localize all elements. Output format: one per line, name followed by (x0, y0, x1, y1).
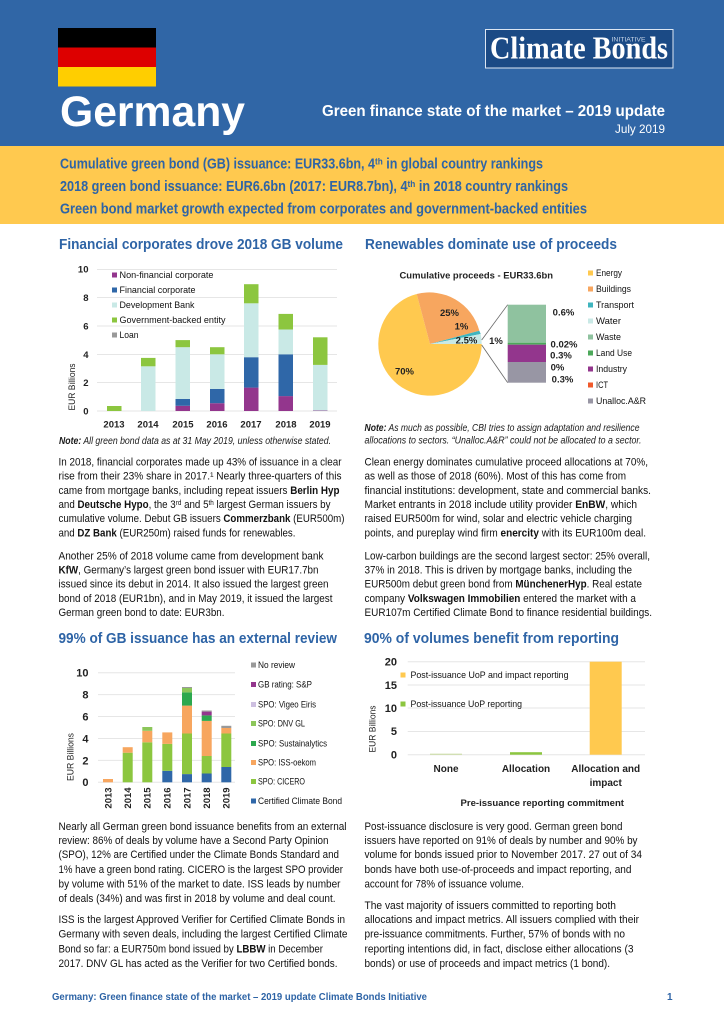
legend: reporting type (400, 670, 568, 709)
pie chart: cumulative proceeds by sector (378, 268, 646, 406)
bar chart: reporting commitment: 10 (385, 703, 397, 715)
title: Germany: Germany (60, 88, 245, 136)
bar chart: external review by year: 4 (82, 734, 89, 746)
bar chart: external review by year: 0 (82, 777, 88, 789)
pie chart: cumulative proceeds by sector: 1% (455, 322, 469, 332)
text block: reporting: account for 78% of issuance volume. (364, 878, 524, 890)
pie chart: cumulative proceeds by sector: 0.6% (553, 308, 575, 318)
bar chart: external review by year: 8 (82, 690, 88, 702)
key finding: cumulative issuance: th (375, 156, 383, 168)
legend: reporting type: Post-issuance UoP reporting (410, 699, 522, 709)
bar chart: issuance by issuer type: 8 (83, 293, 88, 304)
bar chart: issuance by issuer type: EUR Billions (67, 363, 77, 410)
bar chart: issuance by issuer type (67, 264, 337, 430)
bar chart: issuance by issuer type: 2019 (309, 420, 331, 430)
bar chart: reporting commitment: Allocation and (571, 764, 640, 775)
pie chart: cumulative proceeds by sector: 1% (489, 336, 503, 347)
legend: review types: SPO: Sustainalytics (258, 738, 327, 748)
legend: issuer type: Financial corporate (120, 285, 196, 295)
legend: sectors: Unalloc.A&R (596, 396, 646, 406)
legend: review types: SPO: CICERO (258, 776, 305, 786)
legend: review types (251, 660, 342, 806)
bar chart: reporting commitment: 15 (385, 680, 397, 692)
legend: review types: SPO: Vigeo Eiris (258, 700, 316, 710)
text block: financial corporates: issued since its debut in 2014. It also issued the largest green (58, 578, 328, 590)
legend: sectors (588, 268, 646, 406)
legend: sectors: Waste (596, 332, 621, 342)
bar chart: external review by year (66, 660, 342, 809)
legend: sectors: ICT (596, 380, 608, 390)
heading: renewables: Renewables dominate use of proceeds (365, 237, 617, 253)
legend: issuer type: Development Bank (120, 300, 195, 310)
text block: financial corporates: Another 25% of 2018 volume came from development bank (58, 550, 324, 562)
bar chart: external review by year: EUR Billions (66, 733, 76, 781)
bar chart: external review by year: 2013 (104, 787, 114, 809)
text block: use of proceeds: points, and pureplay wind firm enercity with its EUR100m deal. (364, 528, 646, 540)
heading: reporting: 90% of volumes benefit from reporting (364, 631, 619, 647)
text block: financial corporates: largest German issuers by (214, 499, 331, 511)
note: adaptation and resilience: Note: As much as possible, CBI tries to assign adaptation and resilience (364, 423, 640, 434)
bar chart: issuance by issuer type: 2015 (172, 420, 194, 430)
text block: financial corporates: cumulative volume. Debut GB issuers Commerzbank (EUR500m) (58, 513, 344, 525)
legend: review types: SPO: ISS-oekom (258, 758, 316, 768)
bar chart: external review by year: 2019 (222, 787, 232, 809)
note: adaptation and resilience: allocations to sectors. “Unalloc.A&R” could not be allocated to a sector. (364, 436, 642, 446)
legend: sectors: Buildings (596, 284, 631, 294)
text block: external review (58, 821, 348, 970)
text block: reporting: The vast majority of issuers committed to reporting both (364, 900, 616, 912)
text block: reporting: issuers have reported on 91% of deals by number and 90% by (364, 835, 638, 847)
text block: external review: 1% have a green bond rating. CICERO is the largest SPO provider (58, 864, 343, 876)
key findings band (0, 146, 724, 224)
bar chart: reporting commitment: 0 (391, 750, 397, 762)
bar chart: issuance by issuer type: 6 (83, 322, 88, 332)
text block: external review: ISS is the largest Approved Verifier for Certified Climate Bonds in (58, 914, 345, 926)
text block: financial corporates: KfW, Germany’s largest green bond issuer with EUR17.7bn (58, 564, 318, 576)
text block: reporting: volume for bonds issued prior to November 2017. 27 out of 34 (364, 849, 642, 861)
legend: sectors: Water (596, 316, 621, 326)
text block: external review: by volume with 51% of the market to date. ISS leads by number (58, 878, 341, 890)
pie chart: cumulative proceeds by sector: 2.5% (456, 336, 478, 346)
bar chart: reporting commitment: EUR Billions (368, 705, 378, 752)
text block: financial corporates: rd (176, 500, 181, 507)
bar chart: reporting commitment: impact (590, 778, 622, 789)
bar chart: reporting commitment: None (434, 764, 459, 775)
text block: reporting: pre-issuance commitments. Further, 57% of bonds with no (364, 928, 625, 940)
text block: external review: Bond so far: a EUR750m bond issued by LBBW in December (58, 944, 323, 956)
text block: external review: Germany with seven deals, including the largest Certified Climate (58, 928, 348, 940)
text block: use of proceeds: 37% in 2018. This is driven by mortgage banks, including the (364, 564, 632, 576)
bar chart: issuance by issuer type: 2016 (206, 420, 228, 430)
subtitle: Green finance state of the market – 2019 update (322, 103, 665, 120)
text block: use of proceeds: EUR107m Certified Climate Bond to finance residential buildings. (364, 607, 652, 619)
header banner (0, 0, 724, 146)
bar chart: issuance by issuer type: 2013 (103, 420, 125, 430)
text block: reporting: bonds) or use of proceeds and impact metrics (1 bond). (364, 958, 610, 970)
legend: review types: SPO: DNV GL (258, 718, 305, 728)
text block: financial corporates: bond of 2018 (EUR1bn), and in May 2019, it issued the largest (58, 593, 332, 605)
text block: use of proceeds: raised EUR500m for wind, solar and electric vehicle charging (364, 513, 632, 525)
bar chart: issuance by issuer type: 4 (83, 350, 89, 361)
bar chart: issuance by issuer type: 2018 (275, 420, 297, 430)
pie chart: cumulative proceeds by sector: 70% (395, 366, 415, 378)
text block: external review: of deals (34%) and was first in 2018 by volume and deal count. (58, 893, 336, 905)
pie chart: cumulative proceeds by sector: 0.3% (552, 374, 574, 386)
text block: external review: 2017. DNV GL has acted as the Verifier for two Certified bonds. (58, 958, 338, 970)
pie chart: cumulative proceeds by sector: 0.02% (551, 340, 578, 350)
text block: use of proceeds: Market entrants in 2018 include utility provider EnBW, which (364, 499, 637, 511)
text block: use of proceeds (364, 456, 652, 619)
key finding: 2018 issuance: 2018 green bond issuance: EUR6.6bn (2017: EUR8.7bn), 4 (60, 179, 458, 195)
logo: Climate Bonds Initiative: INITIATIVE (612, 36, 646, 44)
legend: reporting type: Post-issuance UoP and impact reporting (410, 670, 568, 680)
heading: external review: 99% of GB issuance has an external review (58, 631, 338, 647)
legend: issuer type: Non-financial corporate (120, 270, 214, 280)
key finding: cumulative issuance: in global country rankings (383, 156, 543, 172)
legend: sectors: Energy (596, 268, 622, 278)
note: adaptation and resilience (364, 423, 642, 446)
bar chart: external review by year: 2017 (182, 787, 194, 809)
text block: financial corporates: In 2018, financial corporates made up 43% of issuance in a clear (58, 456, 342, 468)
text block: financial corporates: came from mortgage banks, including repeat issuers Berlin Hyp (58, 485, 340, 497)
bar chart: external review by year: 2018 (202, 787, 213, 809)
icon: German flag (58, 28, 156, 86)
legend: issuer type: Loan (120, 330, 138, 340)
legend: review types: GB rating: S&P (258, 680, 312, 690)
bar chart: external review by year: 10 (76, 668, 88, 680)
bar chart: issuance by issuer type: 10 (78, 264, 88, 276)
text block: use of proceeds: company Volkswagen Immobilien entered the market with a (364, 593, 636, 605)
text block: financial corporates: and DZ Bank (EUR250m) raised funds for renewables. (58, 528, 296, 540)
key finding: cumulative issuance: Cumulative green bond (GB) issuance: EUR33.6bn, 4 (60, 156, 424, 172)
pie chart: cumulative proceeds by sector: 25% (440, 308, 460, 319)
text block: financial corporates: rise from their 23% share in 2017.¹ Nearly three-quarters of this (58, 470, 342, 482)
bar chart: reporting commitment: 5 (391, 726, 397, 738)
text block: financial corporates: th (209, 500, 214, 507)
legend: sectors: Transport (596, 300, 634, 310)
bar chart: issuance by issuer type: 2017 (240, 420, 262, 430)
text block: financial corporates: and 5 (181, 499, 209, 511)
bar chart: external review by year: 6 (82, 712, 88, 724)
footer: publication line: Germany: Green finance state of the market – 2019 update Climate Bonds Initiative (52, 992, 427, 1003)
text block: financial corporates: German green bond to date: EUR3bn. (58, 607, 224, 619)
pie chart: cumulative proceeds by sector: 0.3% (550, 350, 572, 362)
text block: financial corporates: and Deutsche Hypo, the 3 (58, 499, 179, 511)
bar chart: reporting commitment: Allocation (502, 764, 550, 775)
text block: use of proceeds: financial institutions: development, state and commercial banks. (364, 485, 651, 497)
pie chart: cumulative proceeds by sector: 0% (551, 362, 565, 374)
footer: page number: 1 (667, 992, 673, 1003)
text block: reporting: allocations and impact metrics. All issuers complied with their (364, 914, 639, 926)
text block: use of proceeds: Clean energy dominates cumulative proceed allocations at 70%, (364, 456, 648, 468)
bar chart: external review by year: 2016 (162, 787, 174, 809)
key finding: growth outlook: Green bond market growth expected from corporates and government-backed entities (60, 202, 587, 218)
key finding: 2018 issuance: th (408, 179, 416, 190)
legend: sectors: Industry (596, 364, 627, 374)
bar chart: reporting commitment: 20 (385, 656, 397, 668)
legend: issuer type (112, 270, 226, 340)
text block: financial corporates (58, 456, 344, 619)
heading: financial corporates: Financial corporates drove 2018 GB volume (59, 237, 343, 253)
bar chart: external review by year: 2 (82, 756, 88, 768)
text block: external review: review: 86% of deals by volume have a Second Party Opinion (58, 835, 328, 847)
bar chart: reporting commitment (368, 656, 645, 809)
text block: use of proceeds: as well as those of 2018 (60%). Most of this has come from (364, 470, 626, 482)
bar chart: issuance by issuer type: 2 (83, 378, 88, 389)
key finding: 2018 issuance: in 2018 country rankings (415, 179, 568, 195)
bar chart: reporting commitment: Pre-issuance reporting commitment (460, 798, 625, 809)
bar chart: external review by year: 2015 (142, 787, 154, 809)
legend: review types: No review (258, 660, 295, 670)
bar chart: issuance by issuer type: 0 (83, 406, 88, 418)
legend: sectors: Land Use (596, 348, 632, 358)
text block: reporting: Post-issuance disclosure is very good. German green bond (364, 821, 622, 833)
text block: reporting (364, 821, 642, 970)
text block: external review: (SPO), 12% are Certified under the Climate Bonds Standard and (58, 849, 339, 861)
legend: issuer type: Government-backed entity (120, 315, 226, 325)
date: July 2019 (615, 122, 665, 136)
chart title: Cumulative proceeds - EUR33.6bn (400, 270, 553, 282)
text block: use of proceeds: EUR500m debut green bond from MünchenerHyp. Real estate (364, 578, 642, 590)
legend: review types: Certified Climate Bond (258, 796, 342, 806)
text block: reporting: reporting intentions did, in fact, disclose either allocations (3 (364, 944, 634, 956)
note: data date: Note: All green bond data as at 31 May 2019, unless otherwise stated. (59, 436, 331, 447)
text block: use of proceeds: Low-carbon buildings are the second largest sector: 25% overall, (364, 550, 650, 562)
bar chart: external review by year: 2014 (123, 787, 134, 809)
text block: external review: Nearly all German green bond issuance benefits from an external (58, 821, 346, 833)
logo: Climate Bonds Initiative: Climate Bonds (490, 30, 668, 66)
bar chart: issuance by issuer type: 2014 (137, 420, 159, 430)
text block: reporting: bonds have both use-of-proceeds and impact reporting, and (364, 864, 632, 876)
